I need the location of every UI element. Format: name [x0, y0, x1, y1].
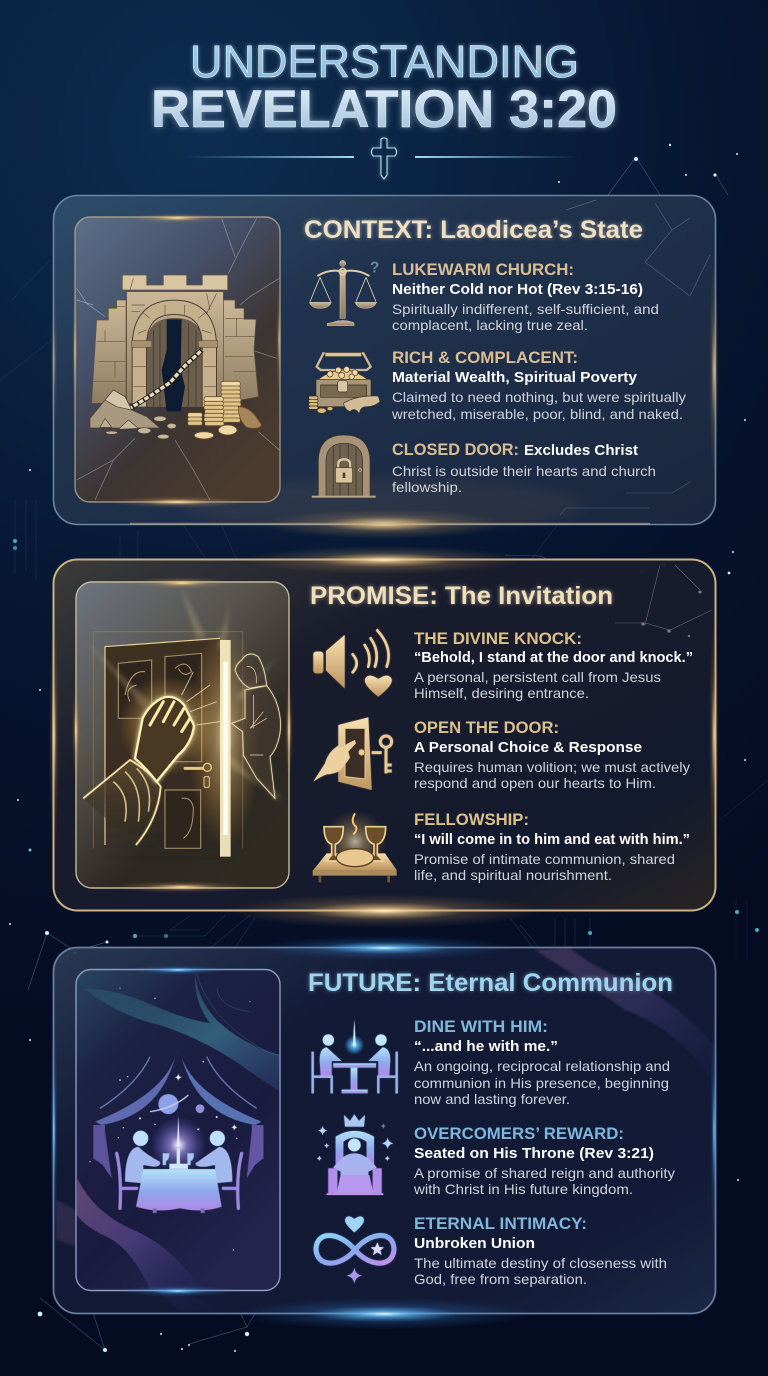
item text: closed door: Excludes Christ: [524, 443, 638, 459]
heading: context: CONTEXT: Laodicea’s State: [304, 216, 643, 244]
panel faint constellation: [566, 200, 710, 296]
panel: context: [50, 196, 719, 539]
light rays: [87, 585, 283, 802]
icon: bread and cups: [313, 810, 397, 882]
candle and glow: [150, 1117, 207, 1173]
icon: two figures dining: [313, 1019, 397, 1093]
panel light flares: [50, 936, 718, 1330]
item text: open the door: respond and open our hearts to Him.: [414, 775, 656, 791]
table: [136, 1169, 222, 1210]
purple wave: [77, 1178, 200, 1290]
title: [151, 36, 617, 179]
item text: open the door: OPEN THE DOOR:: [414, 719, 559, 737]
icon: infinity with heart and star: [316, 1216, 394, 1284]
item text: lukewarm church: LUKEWARM CHURCH:: [392, 261, 574, 279]
stars: [89, 988, 250, 1251]
door handle: [185, 764, 210, 773]
chairs: [117, 1153, 242, 1208]
item text: closed door: [392, 441, 656, 495]
icon: sound and heart: [313, 630, 392, 697]
icon: treasure chest and blindfold: [309, 353, 380, 414]
panel: promise: [49, 546, 719, 928]
planets: [158, 1094, 178, 1114]
coin stacks: [188, 381, 262, 439]
item text: fellowship: Promise of intimate communion, shared: [414, 851, 675, 867]
title line: UNDERSTANDING: UNDERSTANDING: [190, 36, 579, 87]
heading: future: FUTURE: Eternal Communion: [308, 969, 673, 997]
heading: promise: PROMISE: The Invitation: [310, 582, 613, 610]
item text: eternal intimacy: [414, 1215, 667, 1287]
item text: dine with him: “...and he with me.”: [414, 1039, 558, 1055]
item text: overcomers' reward: with Christ in His future kingdom.: [413, 1181, 633, 1197]
item text: dine with him: [414, 1018, 670, 1107]
item text: the divine knock: Himself, desiring entrance.: [414, 685, 589, 701]
item text: fellowship: life, and spiritual nourishment.: [414, 867, 612, 883]
item text: closed door: fellowship.: [392, 479, 462, 495]
sleeve: [83, 760, 161, 845]
gate tower: [92, 275, 258, 412]
icon: locked door: [312, 435, 376, 498]
item text: lukewarm church: Neither Cold nor Hot (Rev 3:15-16): [392, 282, 643, 298]
item text: eternal intimacy: The ultimate destiny of closeness with: [414, 1255, 667, 1271]
teal wave: [83, 972, 280, 1092]
item text: the divine knock: “Behold, I stand at the door and knock.”: [414, 650, 693, 666]
item text: closed door: CLOSED DOOR:: [392, 441, 519, 459]
item text: lukewarm church: [392, 261, 659, 333]
item text: the divine knock: THE DIVINE KNOCK:: [414, 630, 582, 648]
item text: overcomers' reward: A promise of shared reign and authority: [414, 1165, 675, 1181]
item text: closed door: Christ is outside their hearts and church: [392, 463, 656, 479]
panel nebula wave left: [56, 1200, 230, 1312]
item text: dine with him: An ongoing, reciprocal relationship and: [414, 1058, 670, 1074]
item text: fellowship: [414, 811, 690, 883]
icon: throne and crown: [317, 1114, 393, 1195]
title line: REVELATION 3:20: REVELATION 3:20: [151, 80, 617, 139]
item text: rich and complacent: Claimed to need nothing, but were spiritually: [392, 389, 686, 405]
door frame: [93, 632, 243, 848]
item text: lukewarm church: Spiritually indifferent, self-sufficient, and: [392, 301, 659, 317]
item text: the divine knock: A personal, persistent call from Jesus: [414, 669, 661, 685]
item text: open the door: A Personal Choice & Response: [414, 740, 642, 756]
item text: fellowship: “I will come in to him and eat with him.”: [414, 832, 690, 848]
item text: fellowship: FELLOWSHIP:: [414, 811, 529, 829]
item text: dine with him: DINE WITH HIM:: [414, 1018, 548, 1036]
panel nebula wave right: [535, 948, 714, 1085]
item text: eternal intimacy: ETERNAL INTIMACY:: [414, 1215, 587, 1233]
item text: overcomers' reward: Seated on His Throne (Rev 3:21): [414, 1146, 654, 1162]
item text: rich and complacent: wretched, miserable, poor, blind, and naked.: [391, 406, 683, 422]
curtains: [95, 1048, 177, 1125]
item text: rich and complacent: Material Wealth, Spiritual Poverty: [392, 370, 637, 386]
chain: [128, 350, 202, 409]
cracks: [77, 218, 279, 500]
panel faint circuit: [560, 482, 690, 515]
item text: rich and complacent: RICH & COMPLACENT:: [392, 349, 578, 367]
door panels: [118, 653, 202, 848]
item text: the divine knock: [414, 630, 693, 701]
item text: open the door: [414, 719, 690, 791]
knocking hand: [135, 697, 194, 782]
item text: lukewarm church: complacent, lacking true zeal.: [392, 317, 588, 333]
door leaf: [105, 638, 220, 862]
item text: open the door: Requires human volition; we must actively: [414, 759, 690, 775]
icon: hand opening door with key: [313, 717, 392, 790]
panel light flares: [49, 546, 719, 928]
item text: dine with him: communion in His presence, beginning: [414, 1075, 669, 1091]
icon: scales: ?: [370, 259, 379, 276]
panel: future: [50, 936, 718, 1330]
panel faint constellation: [615, 565, 712, 637]
item text: rich and complacent: [391, 349, 686, 422]
icon: scales: [309, 259, 379, 326]
figure of Christ: [232, 654, 281, 798]
panel light flares: [50, 260, 719, 539]
diners: [125, 1131, 232, 1183]
title divider with cross: [186, 138, 578, 179]
hand glow: [118, 675, 218, 775]
item text: overcomers' reward: OVERCOMERS’ REWARD:: [414, 1125, 624, 1143]
illustration card: dining with Christ among the stars: [76, 965, 280, 1297]
light beam: [188, 622, 262, 848]
item text: eternal intimacy: Unbroken Union: [414, 1236, 535, 1252]
rubble: [90, 390, 176, 439]
item text: dine with him: now and lasting forever.: [414, 1091, 570, 1107]
illustration card: hand knocking on door: [72, 577, 293, 893]
illustration card: broken gate and coins: [72, 213, 282, 508]
item text: eternal intimacy: God, free from separation.: [414, 1271, 587, 1287]
item text: overcomers' reward: [413, 1125, 675, 1197]
